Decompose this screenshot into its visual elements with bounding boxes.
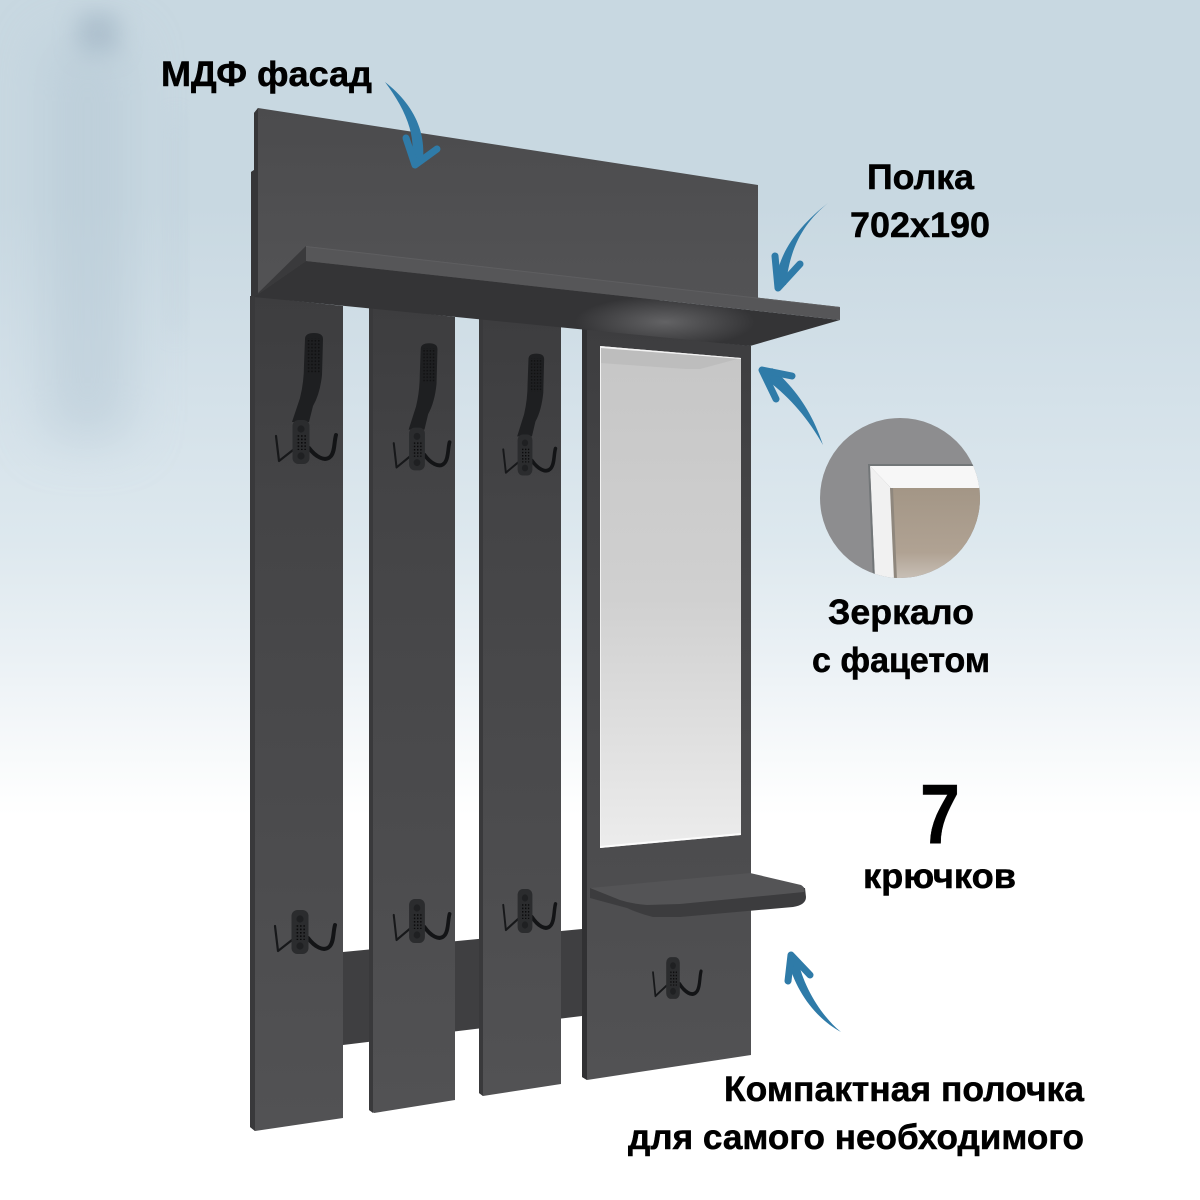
label: compact shelf: Компактная полочка [724,1070,1085,1109]
label: shelf size: Полка [867,158,975,197]
label: compact shelf: для самого необходимого [628,1118,1084,1157]
mirror [600,346,741,848]
plank 1 [250,296,343,1131]
label: bevelled mirror: Зеркало [828,593,974,632]
label: 7 hooks [863,767,1016,896]
lower hook 4 [653,957,701,999]
label: bevelled mirror: с фацетом [812,641,990,680]
mirror panel [582,328,751,1080]
upper hook 3 [503,354,555,475]
plank 3 [479,318,561,1096]
arrow: MDF facade [385,82,437,165]
label: 7 hooks: крючков [863,857,1016,896]
back panel [251,108,758,300]
lower hook 2 [394,899,450,943]
top shelf [254,246,840,348]
coat rack [250,108,840,1131]
label: compact shelf [628,1070,1085,1157]
lower hook 1 [275,910,335,954]
arrow: mirror [762,368,823,445]
upper hook 2 [394,343,450,470]
rear crossbar [343,929,582,1045]
label: shelf size [850,158,990,245]
upper hook 1 [276,333,336,464]
label: bevelled mirror [812,593,990,680]
plank 2 [369,307,455,1113]
label: shelf size: 702x190 [850,206,990,245]
small shelf [590,873,806,917]
arrow: compact shelf [788,955,841,1032]
label: MDF facade: МДФ фасад [161,55,372,94]
label: 7 hooks: 7 [920,767,960,861]
mirror bevel detail circle [820,418,985,580]
arrow: shelf [775,203,828,288]
lower hook 3 [503,889,555,933]
